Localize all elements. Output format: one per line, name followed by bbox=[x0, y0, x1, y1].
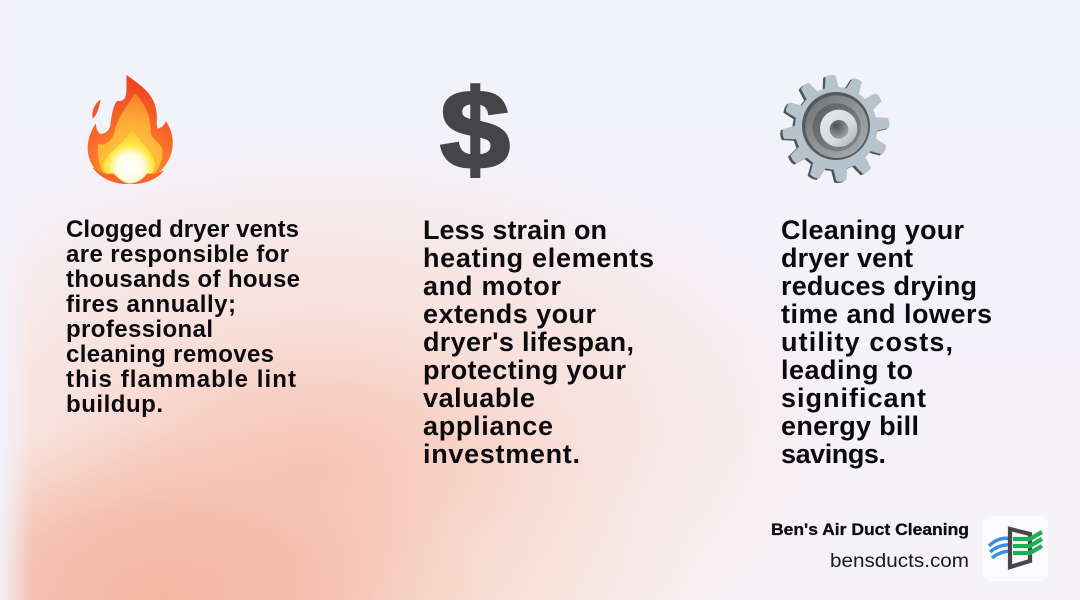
text: fire safety bbox=[66, 216, 300, 418]
text: appliance savings: heating elements bbox=[423, 243, 654, 273]
text: appliance savings: extends your bbox=[423, 299, 596, 329]
text: appliance savings bbox=[423, 215, 654, 469]
text: appliance savings: protecting your bbox=[423, 355, 626, 385]
text: energy savings: savings. bbox=[781, 439, 886, 469]
text: appliance savings: dryer's lifespan, bbox=[423, 327, 634, 357]
text: fire safety: are responsible for bbox=[66, 241, 289, 268]
text: fire safety: Clogged dryer vents bbox=[66, 216, 299, 243]
text: energy savings: dryer vent bbox=[781, 243, 913, 273]
website: bensducts.com bbox=[830, 551, 969, 572]
logo bbox=[983, 516, 1048, 581]
brand name: Ben's Air Duct Cleaning bbox=[771, 520, 969, 539]
text: energy savings: time and lowers bbox=[781, 299, 992, 329]
text: fire safety: this flammable lint bbox=[66, 366, 296, 393]
text: fire safety: cleaning removes bbox=[66, 341, 274, 368]
panel: energy savings bbox=[780, 74, 992, 469]
text: energy savings: utility costs, bbox=[781, 327, 953, 357]
icon: dollar sign: $ bbox=[440, 67, 510, 192]
text: appliance savings: appliance bbox=[423, 411, 553, 441]
text: energy savings: energy bill bbox=[781, 411, 919, 441]
text: energy savings: leading to bbox=[781, 355, 913, 385]
text: appliance savings: Less strain on bbox=[423, 215, 607, 245]
text: appliance savings: investment. bbox=[423, 439, 580, 469]
footer: brand bbox=[771, 516, 1048, 581]
text: energy savings: Cleaning your bbox=[781, 215, 964, 245]
text: appliance savings: and motor bbox=[423, 271, 561, 301]
panel: fire safety bbox=[66, 75, 300, 418]
panel: appliance savings bbox=[423, 67, 654, 469]
text: energy savings: significant bbox=[781, 383, 926, 413]
text: fire safety: thousands of house bbox=[66, 266, 300, 293]
text: fire safety: professional bbox=[66, 316, 213, 343]
text: fire safety: fires annually; bbox=[66, 291, 236, 318]
text: energy savings bbox=[781, 215, 992, 469]
text: energy savings: reduces drying bbox=[781, 271, 977, 301]
text: appliance savings: valuable bbox=[423, 383, 535, 413]
text: fire safety: buildup. bbox=[66, 391, 163, 418]
icon: flame bbox=[88, 75, 173, 184]
icon: gear bbox=[780, 74, 890, 184]
